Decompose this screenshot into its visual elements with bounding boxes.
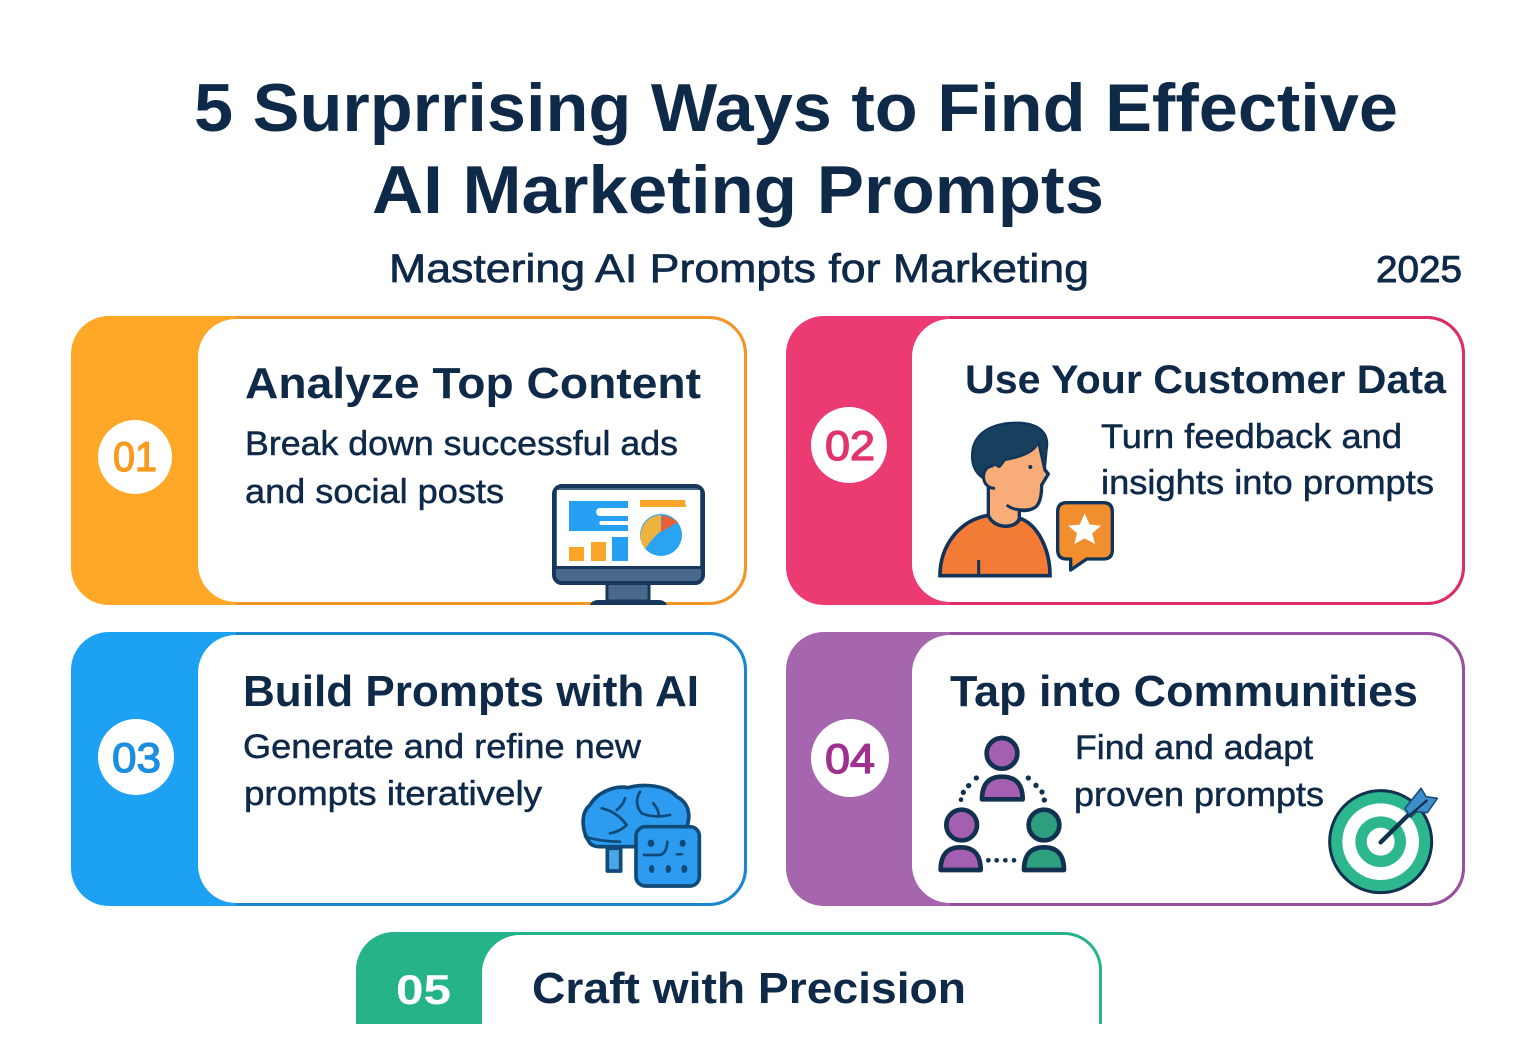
body text 04 bbox=[1074, 729, 1324, 814]
number badge 02: 02 bbox=[825, 422, 875, 469]
body text 03: prompts iteratively bbox=[244, 775, 542, 813]
title: AI Marketing Prompts bbox=[372, 152, 1104, 228]
body text 03: Generate and refine new bbox=[243, 728, 641, 766]
body text 02 bbox=[1101, 418, 1434, 502]
number badge 03: 03 bbox=[112, 734, 161, 781]
icon: analytics monitor bbox=[554, 486, 703, 605]
panel: 02 use your customer data bbox=[786, 316, 1465, 605]
panel: 01 analyze top content bbox=[71, 316, 747, 605]
heading 04: Tap into Communities bbox=[950, 667, 1418, 716]
card shape 02 bbox=[786, 316, 1465, 605]
panel: 05 craft with precision bbox=[356, 932, 1102, 1024]
number badge 02 bbox=[811, 407, 887, 483]
title bbox=[194, 70, 1398, 228]
card interior 05 bbox=[482, 935, 1099, 1024]
card shape 05 bbox=[356, 932, 1102, 1024]
number badge 01: 01 bbox=[113, 433, 157, 480]
title: 5 Surprrising Ways to Find Effective bbox=[194, 70, 1398, 146]
body text 01: Break down successful ads bbox=[245, 425, 678, 463]
heading 01: Analyze Top Content bbox=[245, 359, 701, 408]
heading 05: Craft with Precision bbox=[532, 964, 966, 1013]
panel: 03 build prompts with ai bbox=[71, 632, 747, 906]
body text 03 bbox=[243, 728, 641, 813]
body text 04: proven prompts bbox=[1074, 776, 1324, 814]
body text 02: Turn feedback and bbox=[1101, 418, 1402, 456]
body text 04: Find and adapt bbox=[1075, 729, 1314, 767]
panel: 04 tap into communities bbox=[786, 632, 1465, 906]
card outline tint 02 bbox=[950, 318, 1464, 604]
number badge 01 bbox=[98, 420, 172, 494]
heading 03: Build Prompts with AI bbox=[243, 667, 699, 716]
card shape 01 bbox=[71, 316, 747, 605]
card outline tint 04 bbox=[950, 634, 1464, 904]
icon: brain and chip bbox=[583, 785, 699, 886]
subtitle: Mastering AI Prompts for Marketing bbox=[389, 247, 1089, 291]
card outline tint 03 bbox=[236, 634, 746, 904]
icon: customer with star review bbox=[940, 423, 1112, 576]
card shape 04 bbox=[786, 632, 1465, 906]
body text 01 bbox=[245, 425, 678, 511]
number 05: 05 bbox=[396, 966, 451, 1013]
card interior 04 bbox=[912, 635, 1462, 903]
number badge 03 bbox=[98, 719, 174, 795]
number badge 04 bbox=[811, 719, 889, 797]
card interior 01 bbox=[198, 319, 744, 602]
icon: target with arrow bbox=[1330, 788, 1437, 893]
icon: community network bbox=[941, 738, 1064, 870]
card outline tint 01 bbox=[236, 318, 746, 604]
number badge 04: 04 bbox=[825, 735, 875, 782]
year: 2025 bbox=[1376, 249, 1462, 290]
card interior 02 bbox=[912, 319, 1462, 602]
body text 01: and social posts bbox=[245, 473, 504, 511]
heading 02: Use Your Customer Data bbox=[965, 358, 1447, 402]
card interior 03 bbox=[198, 635, 744, 903]
body text 02: insights into prompts bbox=[1101, 464, 1434, 502]
card shape 03 bbox=[71, 632, 747, 906]
